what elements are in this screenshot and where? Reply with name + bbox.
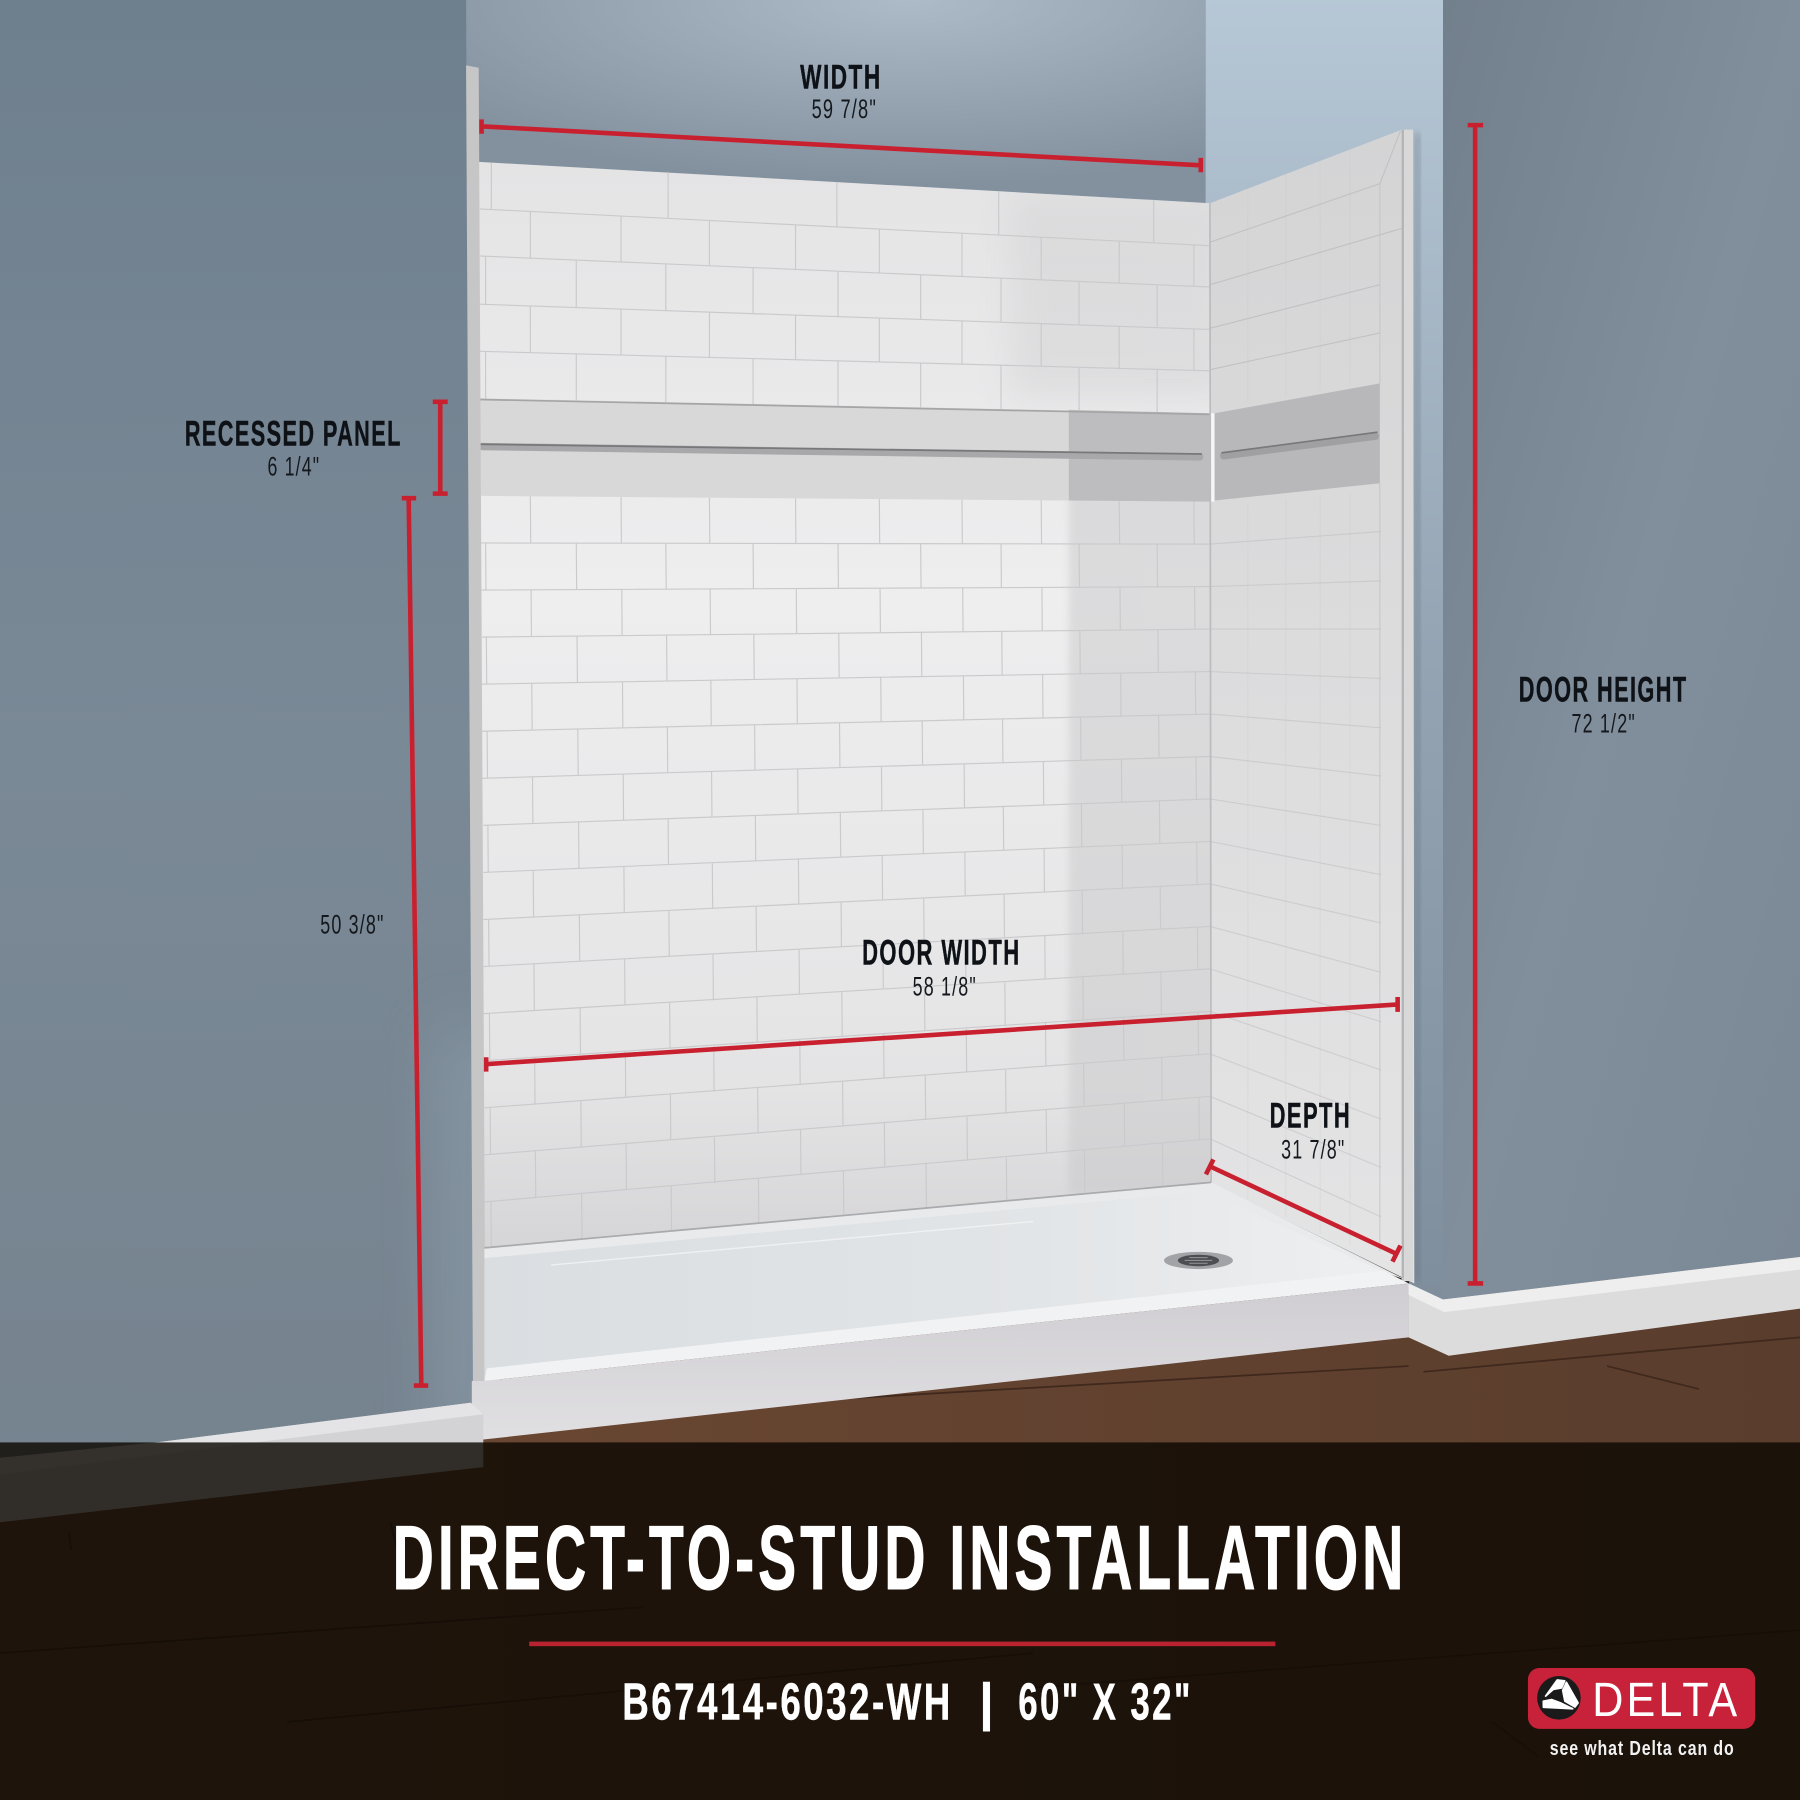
50 3/8 value: 50 3/8"	[320, 909, 385, 939]
logo icon	[1537, 1676, 1581, 1720]
recessed panel back	[480, 398, 1210, 502]
title divider	[529, 1642, 1275, 1646]
door height arrow	[1468, 125, 1483, 1283]
floor	[0, 1297, 1800, 1800]
back wall above shower	[465, 0, 1205, 230]
dimension: 50 3/8	[320, 498, 428, 1386]
trim backing	[471, 166, 498, 1389]
door width label: DOOR WIDTH	[862, 932, 1021, 972]
model and size subtitle: 60" X 32"	[1018, 1673, 1193, 1731]
left wall	[0, 0, 499, 1492]
dimension: door height	[1468, 125, 1688, 1283]
left baseboard	[0, 1403, 483, 1522]
side wall recess	[1210, 383, 1380, 502]
shower side wall	[1210, 130, 1414, 1283]
depth label: DEPTH	[1270, 1095, 1351, 1135]
dimension: depth	[1206, 1095, 1401, 1262]
door width arrow	[486, 997, 1398, 1072]
recessed arrow	[433, 402, 448, 494]
dimension: recessed panel	[185, 402, 448, 494]
tile joints back wall	[480, 163, 1210, 1249]
width arrow	[481, 119, 1201, 172]
logo badge	[1528, 1668, 1755, 1729]
depth value: 31 7/8"	[1281, 1134, 1345, 1164]
door width value: 58 1/8"	[913, 971, 977, 1001]
recessed label: RECESSED PANEL	[185, 413, 402, 453]
width label: WIDTH	[800, 58, 882, 96]
dimension: door width	[486, 932, 1398, 1072]
side trim	[1402, 130, 1413, 1281]
door height label: DOOR HEIGHT	[1519, 669, 1688, 709]
model and size subtitle: B67414-6032-WH	[622, 1673, 953, 1731]
middle side wall	[1205, 0, 1444, 1303]
logo tagline: see what Delta can do	[1550, 1737, 1735, 1760]
model and size subtitle: |	[979, 1673, 997, 1732]
width value: 59 7/8"	[812, 94, 877, 124]
drain	[1164, 1252, 1233, 1269]
left trim	[466, 65, 486, 1383]
right baseboard	[1409, 1257, 1800, 1356]
shower back wall	[479, 162, 1228, 1249]
right foreground wall	[1443, 0, 1800, 1299]
side wall tile joints	[1210, 131, 1402, 1251]
logo wordmark: DELTA	[1592, 1673, 1740, 1727]
shadow on back wall	[1020, 207, 1210, 1191]
50 3/8 arrow	[402, 498, 428, 1386]
recessed value: 6 1/4"	[267, 451, 320, 481]
door height value: 72 1/2"	[1572, 708, 1636, 738]
Delta logo	[1528, 1668, 1755, 1760]
depth arrow	[1206, 1159, 1401, 1262]
shower pan	[472, 1182, 1409, 1440]
corner seam	[1210, 203, 1211, 1182]
shadow of shower panel on wall	[1414, 133, 1420, 1281]
dark footer band	[0, 1442, 1800, 1800]
dimension: width	[481, 58, 1201, 172]
